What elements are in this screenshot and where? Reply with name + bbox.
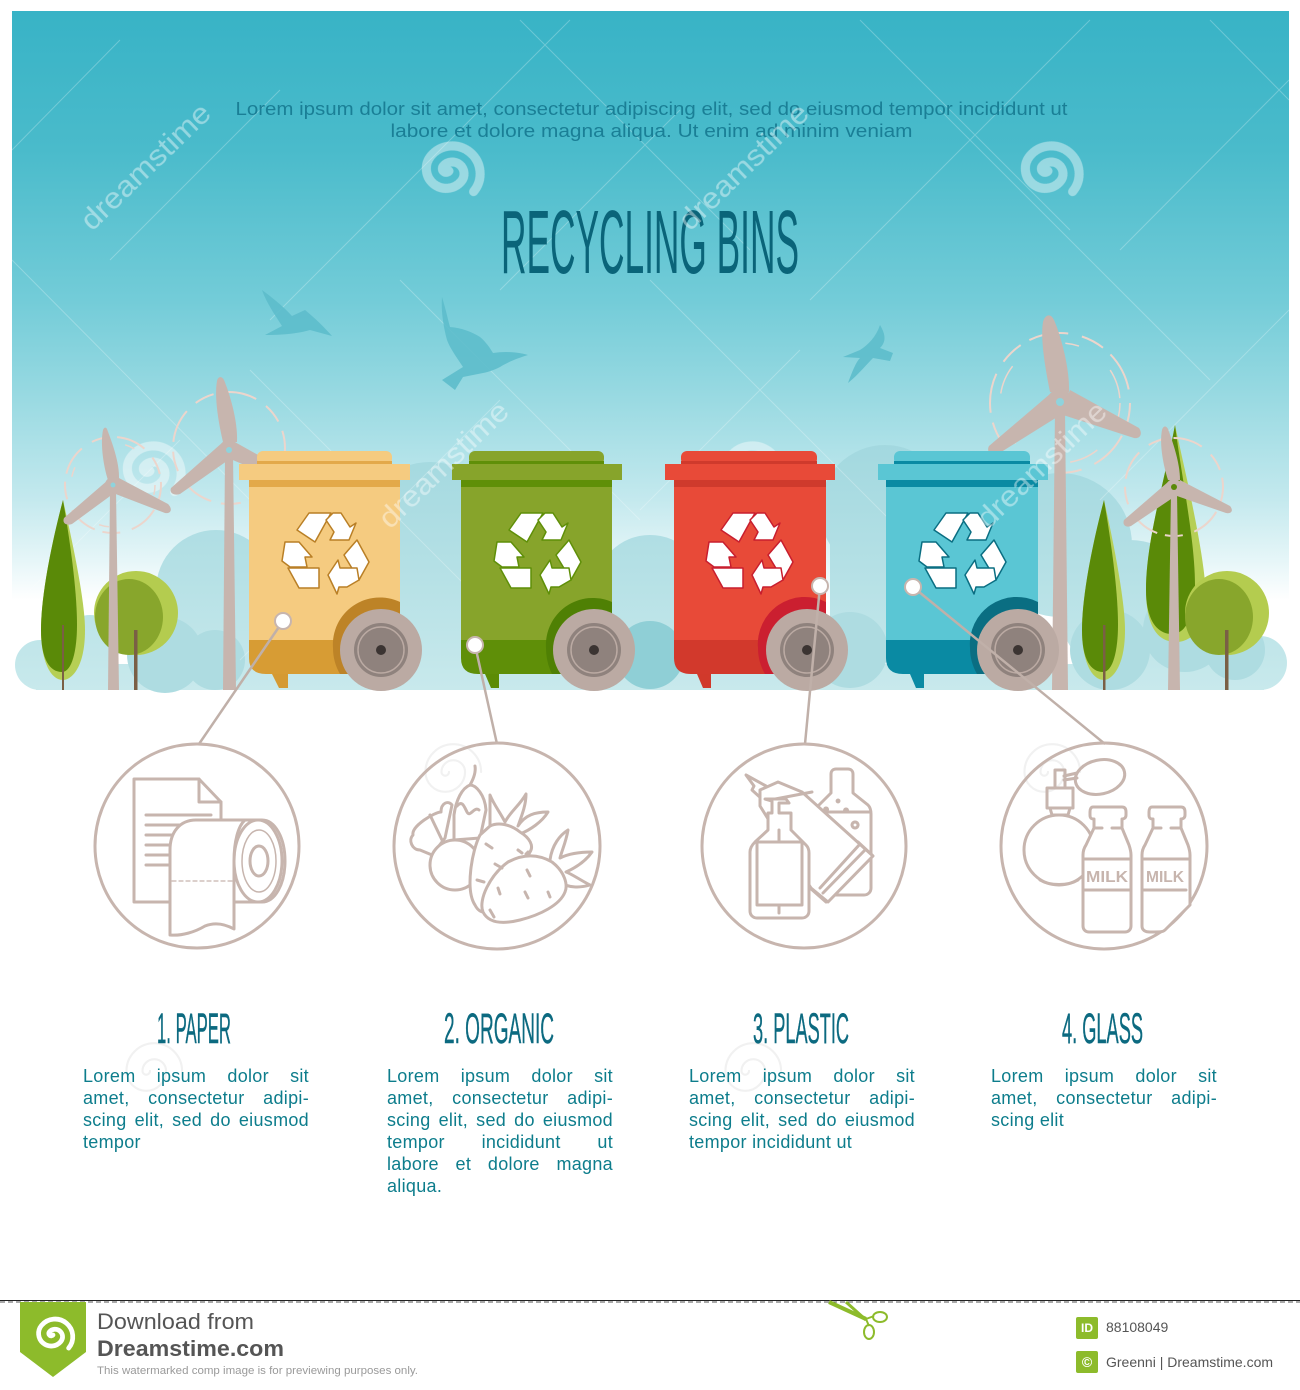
text block: paper: tempor bbox=[83, 1132, 141, 1152]
tree: cypress left bbox=[41, 500, 85, 690]
tree: cypress right bbox=[1082, 500, 1125, 690]
wind turbines bbox=[63, 315, 1232, 690]
leader line 3 bbox=[805, 578, 828, 744]
trees left bbox=[41, 500, 178, 690]
watermark lines bbox=[12, 20, 1289, 660]
text block: organic: scing elit, sed do eiusmod bbox=[387, 1110, 613, 1130]
bin 4: glass bbox=[878, 451, 1059, 691]
icon: plastic bbox=[702, 744, 906, 948]
text block: organic: amet, consectetur adipi- bbox=[387, 1088, 613, 1108]
clouds bbox=[15, 445, 1287, 693]
text block: paper: amet, consectetur adipi- bbox=[83, 1088, 309, 1108]
text block: plastic: tempor incididunt ut bbox=[689, 1132, 852, 1152]
trees right bbox=[1082, 425, 1206, 690]
tree: round left bbox=[94, 571, 178, 690]
icon: glass bbox=[1001, 743, 1207, 949]
intro text bbox=[236, 99, 1068, 141]
text block: paper bbox=[83, 1066, 309, 1152]
icon: paper bbox=[95, 744, 299, 948]
turbine 4 bbox=[1123, 426, 1232, 690]
text block: plastic: Lorem ipsum dolor sit bbox=[689, 1066, 915, 1086]
bin 3: plastic bbox=[665, 451, 848, 691]
id number: 88108049 bbox=[1106, 1319, 1169, 1335]
text block: plastic: scing elit, sed do eiusmod bbox=[689, 1110, 915, 1130]
text block: organic: Lorem ipsum dolor sit bbox=[387, 1066, 613, 1086]
id badge bbox=[1076, 1317, 1098, 1339]
tree: round right bbox=[1185, 571, 1269, 690]
text block: organic: aliqua. bbox=[387, 1176, 442, 1196]
watermark text bbox=[74, 97, 1114, 535]
birds bbox=[262, 290, 893, 390]
turbine 2 bbox=[171, 377, 285, 690]
footer badge bbox=[20, 1302, 86, 1377]
text block: paper: Lorem ipsum dolor sit bbox=[83, 1066, 309, 1086]
text block: glass bbox=[991, 1066, 1217, 1130]
turbine 1 bbox=[63, 428, 171, 690]
text block: plastic: amet, consectetur adipi- bbox=[689, 1088, 915, 1108]
icon: organic bbox=[394, 743, 600, 949]
text block: glass: scing elit bbox=[991, 1110, 1064, 1130]
bin 1: paper bbox=[239, 451, 422, 691]
watermark text: dreamstime bbox=[74, 97, 218, 237]
icon: scissors bbox=[829, 1302, 887, 1339]
text: 1. PAPER bbox=[157, 1005, 231, 1053]
watermark text: dreamstime bbox=[672, 97, 816, 237]
text block: plastic bbox=[689, 1066, 915, 1152]
tree: tall cypress bbox=[1146, 425, 1206, 642]
icon: glass: MILK bbox=[1086, 869, 1128, 886]
text block: organic: tempor incididunt ut bbox=[387, 1132, 613, 1152]
watermark spirals bbox=[119, 135, 1090, 507]
watermark text: dreamstime bbox=[970, 395, 1114, 535]
id badge: ID bbox=[1081, 1321, 1093, 1335]
footer download text: This watermarked comp image is for previewing purposes only. bbox=[97, 1365, 418, 1377]
text block: organic: labore et dolore magna bbox=[387, 1154, 613, 1174]
text block: paper: scing elit, sed do eiusmod bbox=[83, 1110, 309, 1130]
text: 4. GLASS bbox=[1062, 1005, 1143, 1053]
footer download text: Download from bbox=[97, 1309, 254, 1334]
footer cut line bbox=[0, 1300, 1300, 1302]
text: 3. PLASTIC bbox=[753, 1005, 849, 1053]
faint watermark marks on white bbox=[126, 744, 1080, 1091]
text: RECYCLING BINS bbox=[501, 193, 799, 293]
leader line 4 bbox=[905, 579, 1105, 744]
intro text: Lorem ipsum dolor sit amet, consectetur adipiscing elit, sed do eiusmod tempor incididunt ut bbox=[236, 99, 1068, 119]
text block: glass: amet, consectetur adipi- bbox=[991, 1088, 1217, 1108]
icon: glass: MILK bbox=[1146, 869, 1184, 886]
text: 2. ORGANIC bbox=[444, 1005, 554, 1053]
copyright badge bbox=[1076, 1351, 1098, 1373]
watermark text: dreamstime bbox=[372, 395, 516, 535]
intro text: labore et dolore magna aliqua. Ut enim ad minim veniam bbox=[390, 121, 912, 141]
author credit: Greenni | Dreamstime.com bbox=[1106, 1354, 1273, 1370]
footer download text bbox=[97, 1309, 418, 1377]
leader line 1 bbox=[199, 613, 291, 744]
bin 2: organic bbox=[452, 451, 635, 691]
text block: glass: Lorem ipsum dolor sit bbox=[991, 1066, 1217, 1086]
text block: organic bbox=[387, 1066, 613, 1196]
footer download text: Dreamstime.com bbox=[97, 1336, 284, 1361]
leader line 2 bbox=[467, 637, 497, 744]
copyright badge: © bbox=[1082, 1354, 1093, 1370]
turbine 3 bbox=[988, 315, 1141, 690]
sky panel bbox=[12, 11, 1289, 690]
